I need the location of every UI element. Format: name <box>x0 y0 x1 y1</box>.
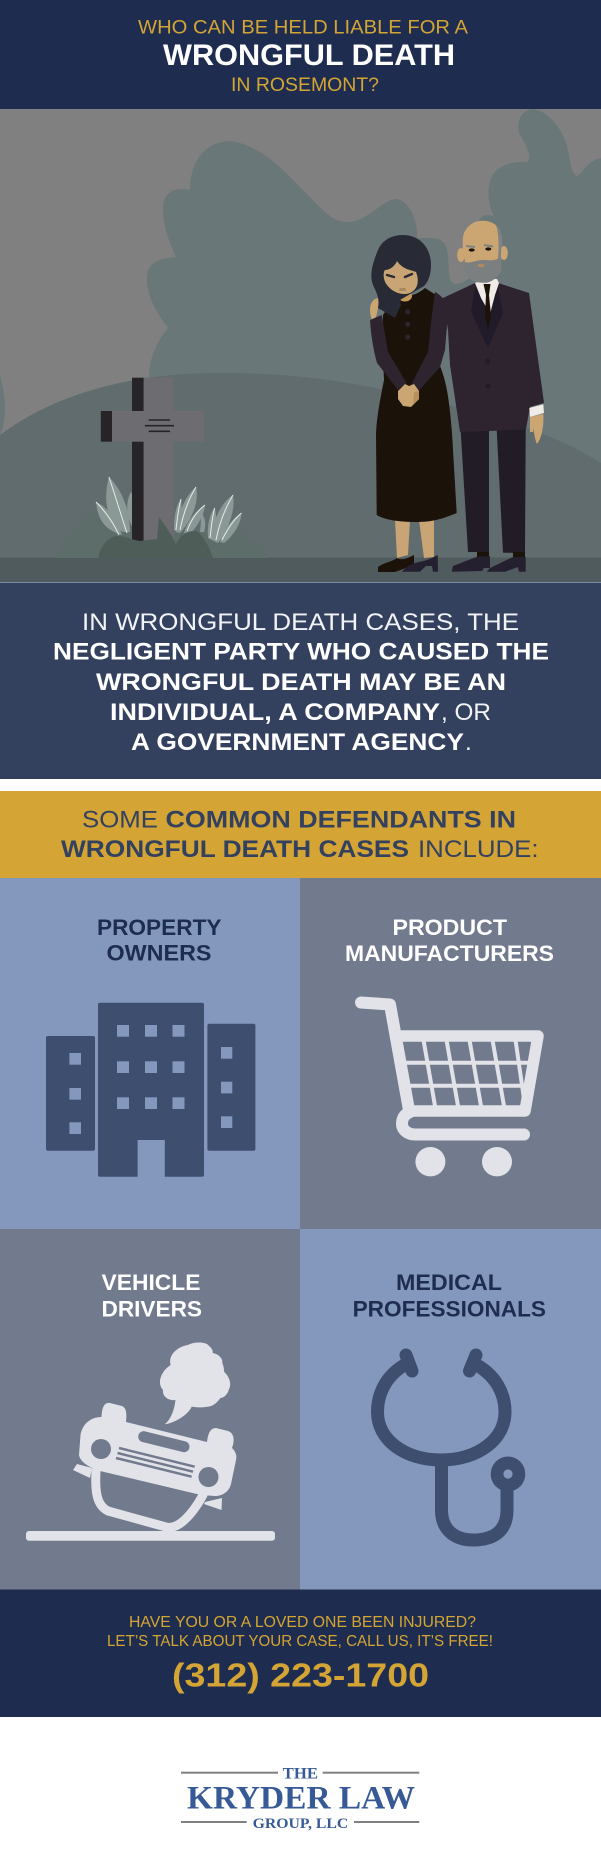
woman hair <box>371 235 431 318</box>
call to action line 1: HAVE YOU OR A LOVED ONE BEEN INJURED? <box>129 1614 476 1631</box>
man shoes <box>452 556 490 572</box>
headlights, window, grille <box>91 1439 111 1459</box>
panel: negligent party statement <box>0 583 601 779</box>
woman sleeves <box>370 292 448 392</box>
label: product manufacturers: PRODUCT <box>392 915 508 940</box>
man ears <box>457 248 465 262</box>
plant veins <box>96 477 242 540</box>
panel: header <box>0 0 601 109</box>
man's hand on shoulder <box>370 295 386 320</box>
illustration: cemetery scene <box>0 109 601 583</box>
phone number: (312) 223-1700 <box>172 1657 429 1694</box>
woman face <box>384 261 418 294</box>
logo: The Kryder Law Group: KRYDER LAW <box>187 1780 415 1816</box>
man socks <box>477 552 489 558</box>
man tie <box>484 284 491 330</box>
label: medical professionals <box>353 1270 546 1322</box>
man lapels <box>471 287 503 348</box>
defendants line 1: COMMON DEFENDANTS IN <box>166 806 516 834</box>
statement line 5: . <box>465 729 472 756</box>
plant leaves <box>96 477 242 543</box>
man trousers <box>461 429 526 553</box>
label: vehicle drivers: DRIVERS <box>102 1297 202 1322</box>
car body <box>79 1403 236 1496</box>
label: medical professionals: MEDICAL <box>396 1270 502 1295</box>
defendants line 1: SOME <box>82 806 158 834</box>
man jacket <box>443 283 544 432</box>
statement line 4: , OR <box>441 699 491 726</box>
ground line <box>26 1531 275 1541</box>
panel: call to action <box>0 1590 601 1717</box>
panel: vehicle drivers <box>0 1229 300 1590</box>
background foliage <box>147 109 601 470</box>
statement line 2: NEGLIGENT PARTY WHO CAUSED THE <box>53 638 549 666</box>
label: property owners <box>97 915 222 966</box>
statement line 4: INDIVIDUAL, A COMPANY <box>110 699 440 726</box>
man hand <box>530 414 543 444</box>
dark bush <box>98 517 213 558</box>
smoke <box>160 1342 230 1424</box>
woman dress <box>376 288 457 522</box>
statement line 1: IN WRONGFUL DEATH CASES, THE <box>82 609 519 636</box>
icon: buildings <box>46 1003 255 1177</box>
label: vehicle drivers: VEHICLE <box>102 1270 200 1295</box>
man head <box>463 221 502 278</box>
man jacket buttons <box>485 359 490 388</box>
logo: The Kryder Law Group: GROUP, LLC <box>253 1816 348 1832</box>
panel: medical professionals <box>300 1229 601 1590</box>
label: product manufacturers <box>345 915 554 966</box>
man brows and eyes <box>466 245 493 247</box>
icon: shopping cart <box>361 1002 538 1176</box>
panel: common defendants heading <box>0 791 601 878</box>
pale bush <box>55 512 268 558</box>
woman clasped hands <box>398 384 419 407</box>
panel: product manufacturers <box>300 878 601 1229</box>
defendants line 2: INCLUDE: <box>418 836 538 863</box>
logo: The Kryder Law Group: THE <box>283 1766 318 1783</box>
statement line 5: A GOVERNMENT AGENCY <box>131 729 464 756</box>
woman dress buttons <box>405 309 410 340</box>
heading line: who can be held liable: WHO CAN BE HELD LIABLE FOR A <box>138 18 468 38</box>
label: medical professionals: PROFESSIONALS <box>353 1297 546 1322</box>
label: property owners: OWNERS <box>106 941 212 966</box>
woman shoes <box>378 555 414 572</box>
ground <box>0 558 601 582</box>
logo: The Kryder Law Group <box>181 1766 419 1832</box>
car roof outline <box>96 1471 203 1527</box>
label: vehicle drivers <box>102 1270 202 1322</box>
defendants line 2: WRONGFUL DEATH CASES <box>61 836 409 863</box>
cross gravestone <box>101 378 204 543</box>
bumpers <box>73 1464 222 1510</box>
woman neck <box>398 290 412 302</box>
woman legs <box>395 520 434 558</box>
defendants line 2 <box>61 836 538 863</box>
icon: stethoscope <box>378 1355 525 1540</box>
man shirt <box>475 279 499 314</box>
call to action line 2: LET’S TALK ABOUT YOUR CASE, CALL US, IT’S FREE! <box>107 1633 493 1650</box>
man cuff <box>529 404 544 417</box>
label: property owners: PROPERTY <box>97 915 222 940</box>
foliage sliver left <box>0 376 5 436</box>
heading line: in Rosemont: IN ROSEMONT? <box>231 75 379 96</box>
icon: overturned car with smoke <box>26 1342 275 1541</box>
man beard <box>464 256 502 283</box>
panel: property owners <box>0 878 300 1229</box>
label: product manufacturers: MANUFACTURERS <box>345 941 554 966</box>
heading line: wrongful death: WRONGFUL DEATH <box>163 39 455 72</box>
statement line 3: WRONGFUL DEATH MAY BE AN <box>96 669 506 696</box>
man side hair <box>496 225 502 258</box>
woman <box>370 235 457 572</box>
hill <box>0 373 601 558</box>
man <box>443 221 544 572</box>
